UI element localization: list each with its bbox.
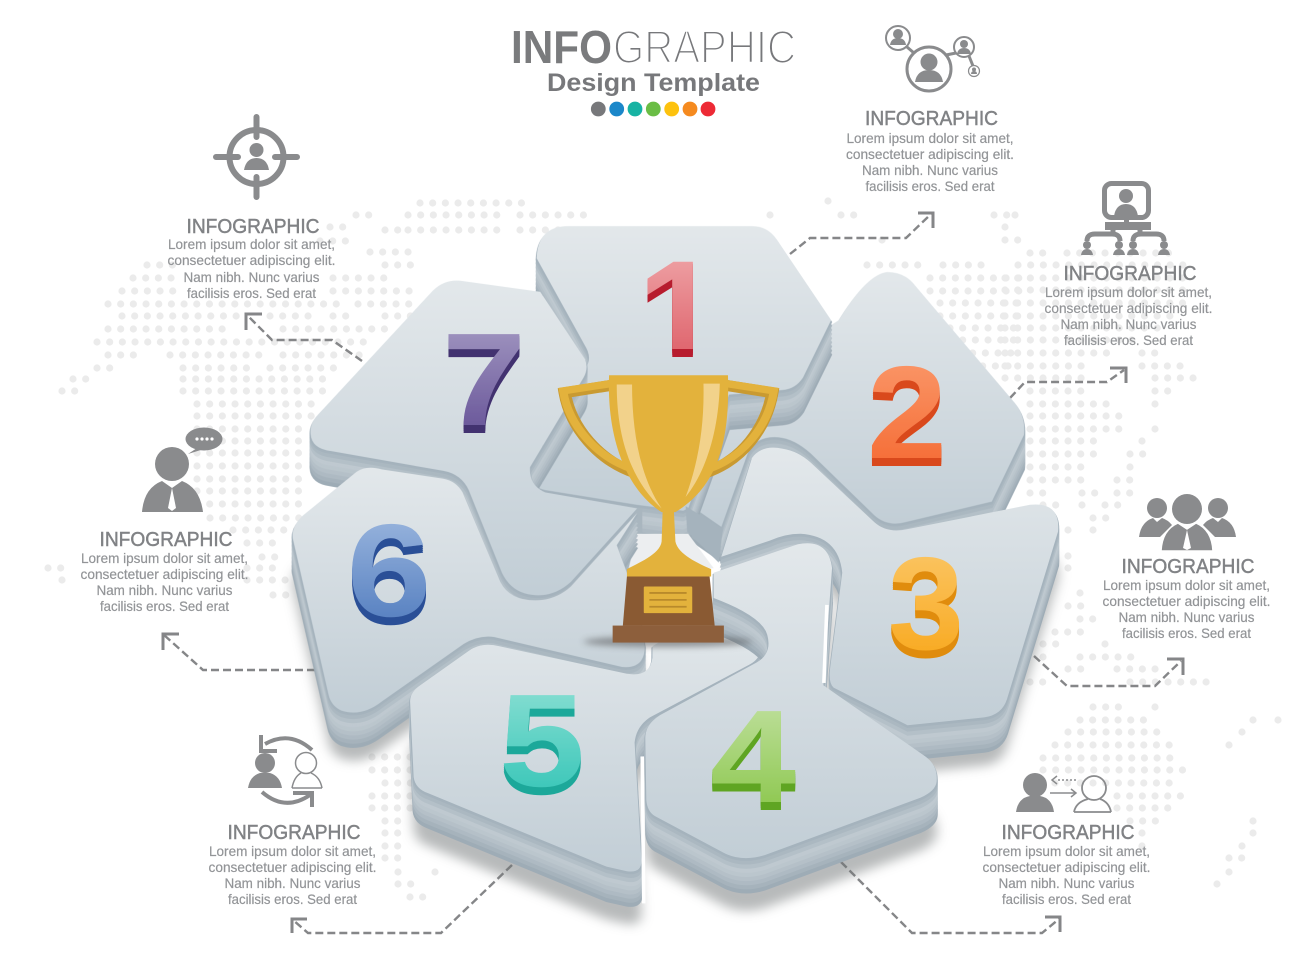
note: piece 4: facilisis eros. Sed erat (1002, 891, 1131, 907)
note: piece 5: facilisis eros. Sed erat (228, 891, 357, 907)
icon: speaking person (142, 428, 222, 512)
icon: person exchange (1016, 773, 1111, 812)
note: piece 7 (168, 216, 336, 301)
title colour dots (591, 102, 715, 116)
note: piece 7: Lorem ipsum dolor sit amet, (168, 236, 335, 252)
numeral 2: 2 (867, 339, 947, 486)
icon: organisation chart (1081, 184, 1170, 255)
note: piece 4: Nam nibh. Nunc varius (998, 875, 1134, 891)
note: piece 3: Nam nibh. Nunc varius (1118, 609, 1254, 625)
note: piece 5: consectetuer adipiscing elit. (208, 859, 376, 875)
dark wall right of trophy stem (686, 506, 723, 563)
title: Design Template (547, 69, 760, 97)
icon: person swap cycle (248, 735, 322, 807)
note: piece 5 (208, 822, 376, 907)
note: piece 3: facilisis eros. Sed erat (1122, 625, 1251, 641)
note: piece 7: consectetuer adipiscing elit. (168, 252, 336, 268)
grey wall left of trophy stem (614, 508, 642, 577)
ground shadow (293, 496, 1058, 924)
note: piece 1: INFOGRAPHIC (865, 108, 998, 130)
trophy cup (609, 375, 728, 512)
note: piece 7: INFOGRAPHIC (186, 216, 320, 238)
note: piece 2: INFOGRAPHIC (1064, 263, 1196, 285)
note: piece 6: facilisis eros. Sed erat (100, 598, 229, 614)
title (511, 21, 796, 97)
title: GRAPHIC (613, 21, 796, 73)
note: piece 1: consectetuer adipiscing elit. (846, 146, 1014, 162)
trophy stem and foot (627, 511, 711, 576)
puzzle piece 5 (410, 610, 760, 906)
base plinth (613, 626, 724, 643)
seven piece hexagon puzzle (293, 226, 1058, 906)
note: piece 5: Nam nibh. Nunc varius (224, 875, 360, 891)
puzzle piece 6 (293, 468, 645, 747)
note: piece 7: facilisis eros. Sed erat (187, 285, 316, 301)
note: piece 5: Lorem ipsum dolor sit amet, (209, 843, 376, 859)
numeral 6: 6 (346, 497, 432, 644)
puzzle piece 4 (645, 543, 937, 893)
arrow: piece 5 to its note (292, 865, 512, 933)
puzzle piece 2 (688, 272, 1024, 561)
trophy shadow (584, 636, 752, 647)
note: piece 2: Lorem ipsum dolor sit amet, (1045, 284, 1212, 300)
note: piece 1: facilisis eros. Sed erat (866, 178, 995, 194)
note: piece 3: INFOGRAPHIC (1122, 556, 1254, 578)
note: piece 5: INFOGRAPHIC (228, 822, 360, 844)
base plaque (644, 587, 692, 613)
trophy (563, 375, 774, 647)
puzzle piece 1 (528, 226, 831, 545)
note: piece 4: Lorem ipsum dolor sit amet, (983, 843, 1150, 859)
arrow: piece 1 to its note (790, 213, 933, 254)
icon: target person (216, 117, 297, 197)
background dotted world map (48, 201, 1279, 897)
note: piece 2 (1044, 263, 1212, 348)
numeral 3: 3 (888, 530, 964, 677)
note: piece 7: Nam nibh. Nunc varius (184, 269, 320, 285)
icon: team (1139, 494, 1236, 551)
puzzle piece 3 (721, 448, 1058, 760)
numeral 1: 1 (637, 229, 721, 397)
note: piece 2: consectetuer adipiscing elit. (1044, 300, 1212, 316)
numeral 4: 4 (710, 683, 796, 830)
centre gap behind trophy (627, 534, 714, 575)
note: piece 3: Lorem ipsum dolor sit amet, (1103, 577, 1270, 593)
arrow: piece 2 to its note (1010, 368, 1126, 398)
note: piece 2: Nam nibh. Nunc varius (1060, 316, 1196, 332)
numeral 5: 5 (499, 667, 585, 814)
arrow: piece 3 to its note (1034, 656, 1183, 686)
title: INFO (511, 21, 612, 73)
trophy base (623, 576, 715, 626)
note: piece 1: Lorem ipsum dolor sit amet, (846, 130, 1014, 146)
numeral 7: 7 (442, 306, 526, 453)
note: piece 6 (80, 529, 248, 614)
note: piece 6: Lorem ipsum dolor sit amet, (81, 550, 248, 566)
note: piece 6: Nam nibh. Nunc varius (96, 582, 232, 598)
note: piece 1 (846, 108, 1014, 194)
trophy handles (563, 384, 774, 473)
note: piece 4 (982, 822, 1150, 907)
arrow: piece 7 to its note (246, 314, 362, 361)
note: piece 4: INFOGRAPHIC (1002, 822, 1134, 844)
note: piece 3: consectetuer adipiscing elit. (1102, 593, 1270, 609)
note: piece 2: facilisis eros. Sed erat (1064, 332, 1193, 348)
note: piece 6: INFOGRAPHIC (100, 529, 232, 551)
arrow: piece 4 to its note (841, 862, 1060, 933)
cup highlights (617, 384, 720, 508)
arrow: piece 6 to its note (163, 634, 315, 670)
note: piece 6: consectetuer adipiscing elit. (80, 566, 248, 582)
puzzle piece 7 (311, 281, 637, 630)
note: piece 1: Nam nibh. Nunc varius (862, 162, 998, 178)
white slits between pieces (642, 605, 827, 903)
icon: people network (886, 26, 980, 91)
note: piece 3 (1102, 556, 1270, 641)
note: piece 4: consectetuer adipiscing elit. (982, 859, 1150, 875)
